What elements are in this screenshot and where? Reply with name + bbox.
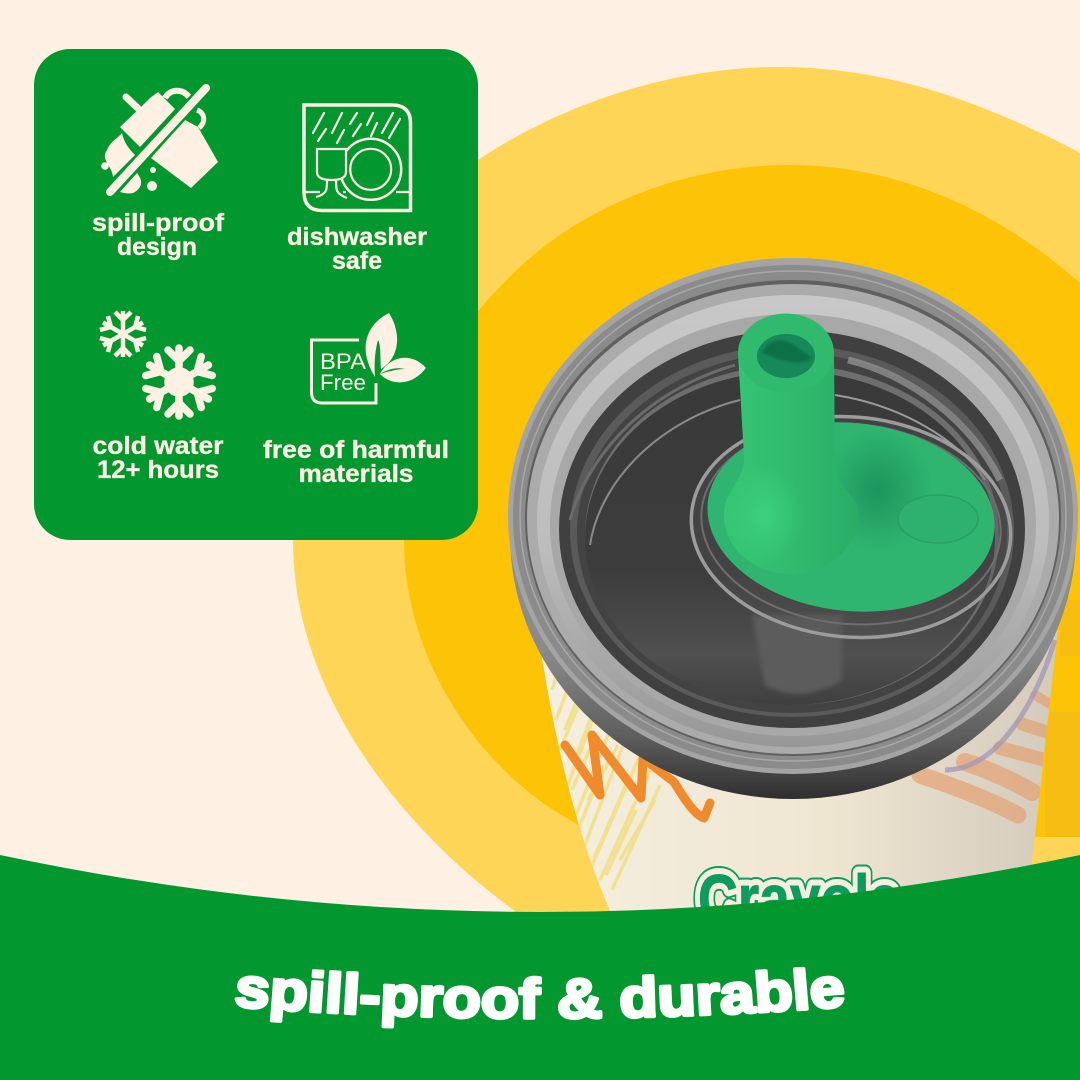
label: dishwasher safe — [287, 223, 427, 275]
silicone seal disc — [698, 408, 1004, 626]
outer light yellow arc — [293, 67, 1080, 920]
lid lower dark band — [510, 271, 1076, 799]
label: free of harmful materials: free of harmful — [263, 436, 449, 464]
lid rim — [508, 258, 1078, 774]
label: cold water — [92, 432, 224, 484]
icon: BPA free: Free — [320, 370, 366, 395]
crayola logo: Crayola — [698, 861, 901, 937]
clear ring around seal — [682, 403, 1020, 651]
label: spill-proof design — [92, 209, 225, 261]
tumbler body — [539, 630, 1058, 915]
icon: BPA free — [312, 313, 426, 403]
crayola logo: Crayola — [698, 861, 901, 937]
infographic canvas — [34, 49, 1080, 912]
label: dishwasher safe: safe — [332, 247, 382, 275]
silicone straw — [724, 314, 859, 574]
label: spill-proof design: design — [117, 233, 197, 261]
label: spill-proof design: spill-proof — [92, 209, 225, 237]
orange scribble — [565, 735, 710, 818]
lid interior — [559, 330, 1025, 728]
orange crayon rays — [920, 695, 1052, 815]
label: dishwasher safe: dishwasher — [287, 223, 427, 251]
crayola logo: Crayola — [698, 861, 901, 937]
label: free of harmful materials — [263, 436, 449, 488]
bottom green banner — [0, 855, 1080, 1080]
seal vent dimple — [898, 495, 978, 543]
panel: features — [34, 49, 478, 540]
label: cold water: 12+ hours — [97, 456, 219, 484]
icon: BPA free: BPA — [320, 349, 366, 374]
label: cold water: cold water — [92, 432, 224, 460]
crayon drawings on body — [552, 640, 1055, 890]
purple crayon arc — [945, 640, 1055, 770]
icon: small snowflake — [99, 311, 147, 357]
right side reflection bands — [1025, 600, 1080, 860]
headline: spill-proof & durable — [234, 966, 845, 1028]
inner golden arc — [404, 165, 1080, 900]
label: free of harmful materials: materials — [298, 460, 414, 488]
lower straw under lid — [752, 615, 842, 694]
icon: dishwasher — [304, 105, 410, 210]
icon: large snowflake — [144, 348, 214, 416]
icon: spill-proof cup — [101, 88, 218, 193]
